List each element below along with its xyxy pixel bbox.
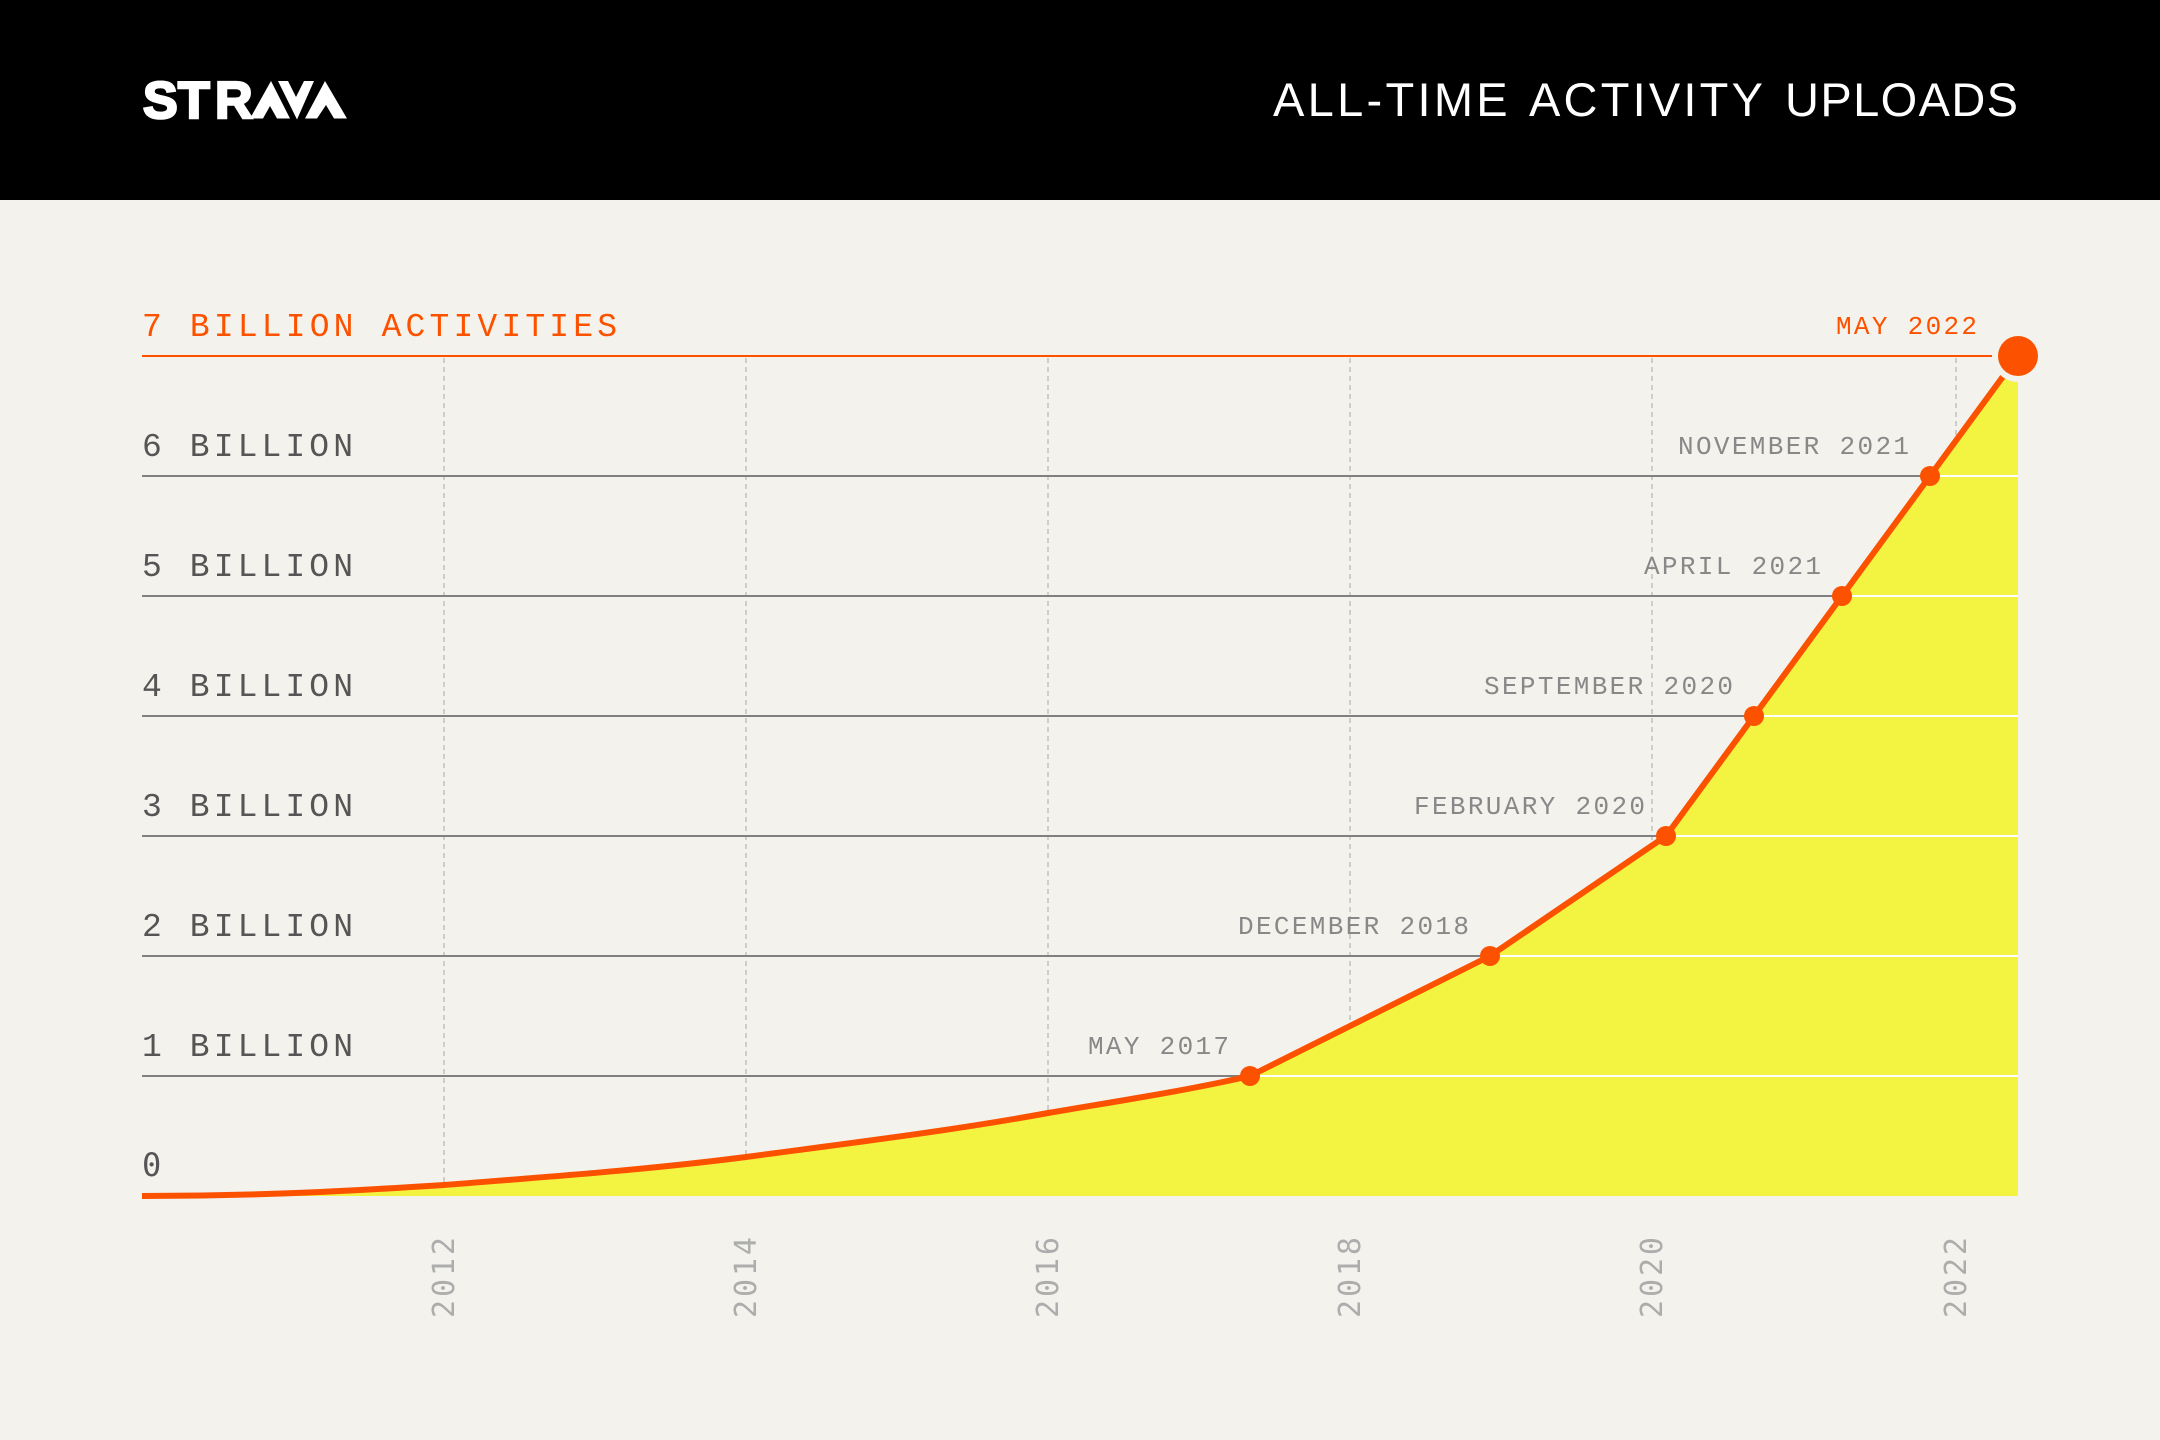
milestone date labels: [1088, 312, 1977, 1062]
year: 2016: 2016: [1031, 1237, 1066, 1318]
y axis labels: [142, 309, 617, 1184]
7 billion line: [142, 355, 1992, 357]
area under curve: [142, 356, 2018, 1196]
year gridlines: [444, 358, 1956, 1186]
label: 5 billion: 5 BILLION: [142, 549, 353, 586]
white level lines inside the area: [1250, 476, 2018, 1076]
date: February 2020: FEBRUARY 2020: [1414, 792, 1645, 822]
year: 2022: 2022: [1939, 1237, 1974, 1318]
date: April 2021: APRIL 2021: [1644, 552, 1821, 582]
year: 2020: 2020: [1635, 1237, 1670, 1318]
year: 2018: 2018: [1333, 1237, 1368, 1318]
date: December 2018: DECEMBER 2018: [1238, 912, 1469, 942]
x axis year labels: [427, 1237, 1974, 1318]
title: ACTIVITY: [1529, 73, 1782, 126]
label: zero: 0: [142, 1146, 161, 1184]
date: May 2022: MAY 2022: [1836, 312, 1977, 342]
label: 4 billion: 4 BILLION: [142, 669, 353, 706]
chart: all-time uploads: [142, 309, 2044, 1318]
label: 1 billion: 1 BILLION: [142, 1029, 353, 1066]
title: ALL-TIME: [1273, 73, 1527, 126]
header band: [0, 0, 2160, 200]
milestone markers: [1240, 466, 1940, 1086]
growth curve: [142, 356, 2018, 1196]
year: 2014: 2014: [729, 1237, 764, 1318]
year: 2012: 2012: [427, 1237, 462, 1318]
label: 6 billion: 6 BILLION: [142, 429, 353, 466]
billion level lines: [142, 476, 1930, 1076]
label: 3 billion: 3 BILLION: [142, 789, 353, 826]
label: 7 billion activities: 7 BILLION ACTIVITIES: [142, 309, 617, 346]
date: September 2020: SEPTEMBER 2020: [1484, 672, 1733, 702]
date: May 2017: MAY 2017: [1088, 1032, 1229, 1062]
final marker: May 2022: [1998, 336, 2038, 376]
label: 2 billion: 2 BILLION: [142, 909, 353, 946]
title: UPLOADS: [1785, 73, 2019, 126]
date: November 2021: NOVEMBER 2021: [1678, 432, 1909, 462]
final marker halo: [1992, 330, 2044, 382]
logo: Strava wordmark: STRAVA: [143, 72, 343, 130]
